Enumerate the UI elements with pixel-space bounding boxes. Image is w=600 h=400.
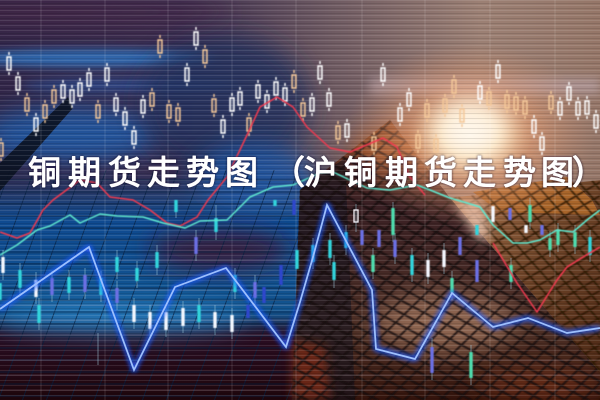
upper candlesticks: orange	[0, 35, 553, 161]
mint line chart	[0, 172, 600, 255]
lower candlesticks: wicks	[3, 198, 590, 385]
building: main tower	[292, 120, 600, 400]
light glow	[345, 43, 600, 227]
lower candlesticks: white bodies	[3, 206, 526, 332]
upper candlesticks: white	[7, 27, 598, 155]
title: 铜期货走势图（沪铜期货走势图）	[28, 154, 600, 191]
hollow candle	[354, 210, 358, 222]
dark diagonal band	[0, 97, 73, 191]
blue neon line chart	[0, 205, 600, 370]
lower candlesticks: mint bodies	[373, 205, 575, 378]
building: right facade	[450, 177, 600, 372]
lower candlesticks: deep blue bodies	[248, 200, 294, 318]
red line chart	[0, 97, 600, 312]
lower candlesticks: cyan bodies	[0, 200, 590, 323]
lower candlesticks: violet bodies	[52, 208, 542, 373]
